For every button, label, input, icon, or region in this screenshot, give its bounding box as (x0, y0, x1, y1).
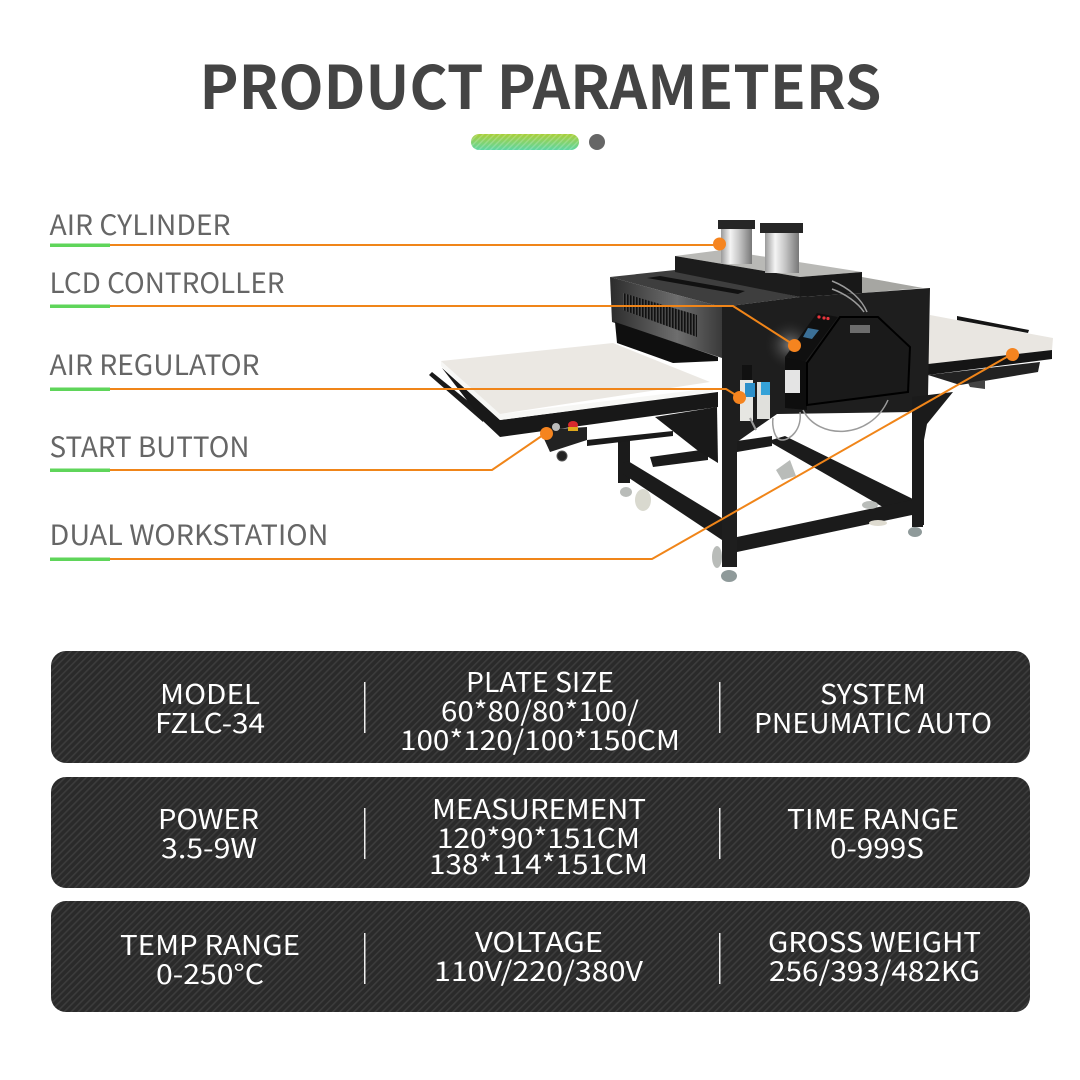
air hoses (773, 281, 888, 440)
air regulator unit (740, 365, 770, 430)
press body (610, 250, 953, 567)
spec: model: FZLC-34 (155, 702, 265, 741)
spec: system (754, 673, 992, 741)
spec: plate size: 60*80/80*100/ (441, 690, 639, 729)
callout: air cylinder: AIR CYLINDER (50, 204, 230, 244)
callout: air regulator: AIR REGULATOR (50, 344, 260, 384)
spec: time range: TIME RANGE (787, 798, 959, 837)
spec: plate size (400, 661, 680, 758)
callout: dual workstation: DUAL WORKSTATION (50, 514, 328, 554)
callout: LCD controller: LCD CONTROLLER (50, 262, 284, 302)
spec: plate size: 100*120/100*150CM (400, 719, 680, 758)
product photo: pneumatic heat press machine (429, 220, 1053, 582)
spec: power (158, 798, 259, 866)
callout: start button: START BUTTON (50, 426, 250, 466)
spec: time range: 0-999S (830, 827, 924, 866)
spec: temp range: TEMP RANGE (120, 924, 300, 963)
spec: voltage (434, 921, 644, 989)
casters and feet (620, 460, 922, 582)
spec: measurement: MEASUREMENT (432, 788, 646, 827)
spec: system: PNEUMATIC AUTO (754, 702, 992, 741)
spec: plate size: PLATE SIZE (466, 661, 614, 700)
spec: power: 3.5-9W (161, 827, 257, 866)
panel: specs row 2 (51, 777, 1030, 888)
callout: air cylinder (50, 204, 726, 250)
spec: voltage: VOLTAGE (475, 921, 603, 960)
LCD control panel (785, 313, 910, 410)
panel: specs row 1 (51, 651, 1030, 763)
start button box (540, 421, 587, 461)
spec: measurement: 138*114*151CM (429, 843, 648, 882)
title: PRODUCT PARAMETERS (200, 40, 882, 127)
spec: temp range (120, 924, 300, 992)
callout: dual workstation (50, 348, 1019, 561)
spec: voltage: 110V/220/380V (434, 950, 644, 989)
panel: specs row 3 (51, 901, 1030, 1012)
cylinders (718, 220, 803, 273)
spec: gross weight: 256/393/482KG (769, 950, 980, 989)
spec: measurement (429, 788, 648, 882)
spec: measurement: 120*90*151CM (437, 817, 640, 856)
rear frame legs and beams (618, 400, 924, 552)
title accent: green bar and dot (471, 134, 605, 150)
callout: LCD controller (50, 262, 801, 352)
spec: temp range: 0-250°C (156, 953, 264, 992)
callout: air regulator (50, 344, 746, 404)
spec: system: SYSTEM (820, 673, 926, 712)
spec: model: MODEL (160, 673, 260, 712)
spec: power: POWER (158, 798, 259, 837)
spec: time range (787, 798, 959, 866)
spec: model (155, 673, 265, 741)
right platen (928, 315, 1053, 389)
left platen (429, 343, 718, 463)
callout: start button (50, 426, 553, 472)
spec: gross weight (768, 921, 981, 989)
spec: gross weight: GROSS WEIGHT (768, 921, 981, 960)
